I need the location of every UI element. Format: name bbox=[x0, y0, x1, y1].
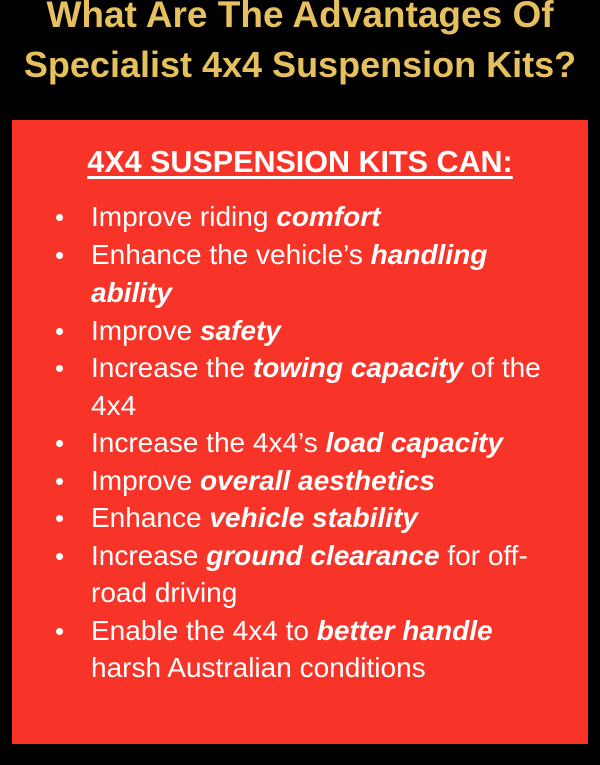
bullet list: • bbox=[55, 541, 64, 571]
bullet list: Improve safety bbox=[91, 315, 281, 346]
bullet list: Enable the 4x4 to better handle bbox=[91, 615, 493, 646]
title bbox=[24, 0, 576, 85]
bullet list: Enhance the vehicle’s handling bbox=[91, 239, 487, 270]
heading: 4X4 SUSPENSION KITS CAN: bbox=[87, 145, 513, 179]
bullet list: Increase the 4x4’s load capacity bbox=[91, 427, 503, 458]
bullet list: • bbox=[55, 503, 64, 533]
bullet list: ability bbox=[91, 277, 172, 308]
bullet list: Increase the towing capacity of the bbox=[91, 352, 541, 383]
bullet list: Improve riding comfort bbox=[91, 201, 380, 232]
bullet list: Enhance vehicle stability bbox=[91, 502, 418, 533]
bullet list: Increase ground clearance for off- bbox=[91, 540, 528, 571]
bullet list: road driving bbox=[91, 577, 237, 608]
bullet list: • bbox=[55, 616, 64, 646]
bullet list: 4x4 bbox=[91, 390, 136, 421]
bullet list: Improve overall aesthetics bbox=[91, 465, 435, 496]
bullet list: • bbox=[55, 240, 64, 270]
bullet list: • bbox=[55, 202, 64, 232]
bullet list: • bbox=[55, 316, 64, 346]
title: Specialist 4x4 Suspension Kits? bbox=[24, 44, 576, 85]
bullet list bbox=[55, 201, 541, 683]
bullet list: • bbox=[55, 466, 64, 496]
bullet list: • bbox=[55, 428, 64, 458]
bullet list: harsh Australian conditions bbox=[91, 652, 426, 683]
bullet list: • bbox=[55, 353, 64, 383]
panel: advantages list bbox=[12, 120, 588, 744]
